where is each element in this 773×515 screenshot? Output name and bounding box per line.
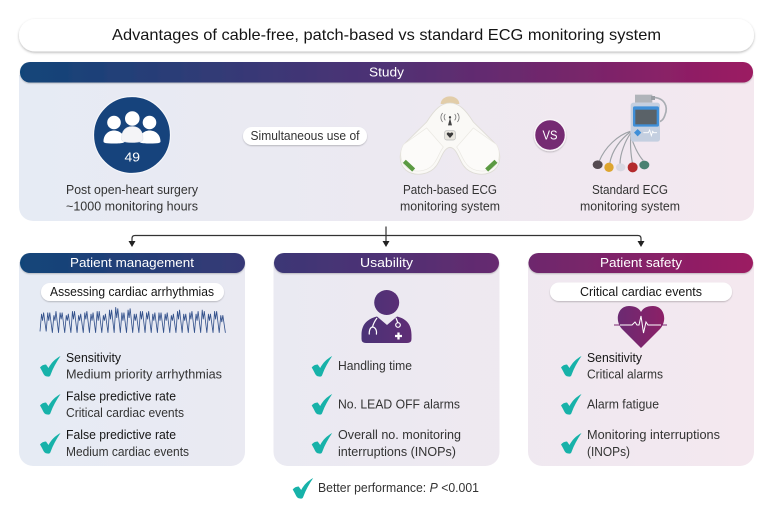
vs badge: VS	[542, 128, 558, 142]
icon: heart with ECG line	[614, 306, 667, 348]
check and text: overall interruptions: Overall no. monitoring	[338, 428, 461, 442]
icon: standard ECG monitor	[593, 95, 666, 172]
check and text: handling time	[312, 356, 412, 377]
callout: simultaneous use: Simultaneous use of	[250, 129, 360, 143]
icon: patch-based ECG device	[400, 96, 500, 174]
panel: usability	[274, 253, 500, 466]
study heading bar: Study	[369, 66, 405, 80]
title: Advantages of cable-free, patch-based vs standard ECG monitoring system	[112, 27, 661, 44]
check and text: sensitivity	[561, 351, 663, 382]
patient safety heading: Patient safety	[600, 256, 683, 270]
check and text: monitoring interruptions: (INOPs)	[587, 445, 630, 459]
callout: assessing cardiac arrhythmias: Assessing cardiac arrhythmias	[50, 285, 214, 299]
icon: doctor	[362, 290, 412, 343]
check and text: alarm fatigue: Alarm fatigue	[587, 398, 659, 412]
panel: study	[19, 62, 754, 221]
usability heading	[274, 253, 499, 273]
check and text: false predictive rate, medium: False predictive rate	[66, 428, 176, 442]
callout: critical cardiac events	[550, 282, 732, 301]
patch-based label: monitoring system	[400, 200, 500, 214]
check and text: monitoring interruptions	[561, 428, 720, 459]
title	[19, 19, 754, 52]
standard ECG label: monitoring system	[580, 200, 680, 214]
check and text: sensitivity: Sensitivity	[66, 351, 122, 365]
check and text: overall interruptions: interruptions (INOPs)	[338, 445, 456, 459]
vs badge	[534, 120, 566, 150]
patient management heading: Patient management	[70, 256, 195, 270]
check and text: overall interruptions	[312, 428, 461, 459]
check and text: handling time: Handling time	[338, 359, 412, 373]
panel: patient safety	[528, 253, 754, 466]
patient cohort text: Post open-heart surgery	[66, 183, 199, 197]
study heading bar	[20, 62, 753, 82]
check and text: monitoring interruptions: Monitoring interruptions	[587, 428, 720, 442]
check and text: sensitivity: Critical alarms	[587, 368, 663, 382]
check and text: sensitivity	[40, 351, 222, 382]
patient safety heading	[528, 253, 753, 273]
check and text: sensitivity: Sensitivity	[587, 351, 643, 365]
check and text: alarm fatigue	[561, 394, 659, 415]
patch-based label	[400, 183, 500, 214]
panel: patient management	[19, 253, 245, 466]
patient cohort text	[66, 183, 199, 214]
arrows: study to three outcomes	[128, 226, 644, 247]
callout: critical cardiac events: Critical cardiac events	[580, 285, 702, 299]
check and text: false predictive rate, critical: Critical cardiac events	[66, 406, 184, 420]
check and text: false predictive rate, medium: Medium cardiac events	[66, 445, 189, 459]
chart: ECG arrhythmia trace	[40, 307, 225, 333]
check and text: false predictive rate, critical	[40, 390, 184, 420]
patient cohort text: ~1000 monitoring hours	[66, 200, 198, 214]
patient management heading	[20, 253, 245, 273]
legend: better performance	[293, 478, 479, 499]
standard ECG label: Standard ECG	[592, 183, 668, 197]
icon: 49 patients: 49	[124, 150, 140, 164]
legend: better performance: Better performance: P <0.001	[318, 481, 479, 495]
check and text: lead off alarms: No. LEAD OFF alarms	[338, 398, 460, 412]
check and text: sensitivity: Medium priority arrhythmias	[66, 368, 222, 382]
usability heading: Usability	[360, 256, 414, 270]
patch-based label: Patch-based ECG	[403, 183, 497, 197]
check and text: lead off alarms	[312, 394, 460, 415]
standard ECG label	[580, 183, 680, 214]
check and text: false predictive rate, critical: False predictive rate	[66, 390, 176, 404]
icon: 49 patients	[94, 96, 170, 174]
check and text: false predictive rate, medium	[40, 428, 189, 459]
